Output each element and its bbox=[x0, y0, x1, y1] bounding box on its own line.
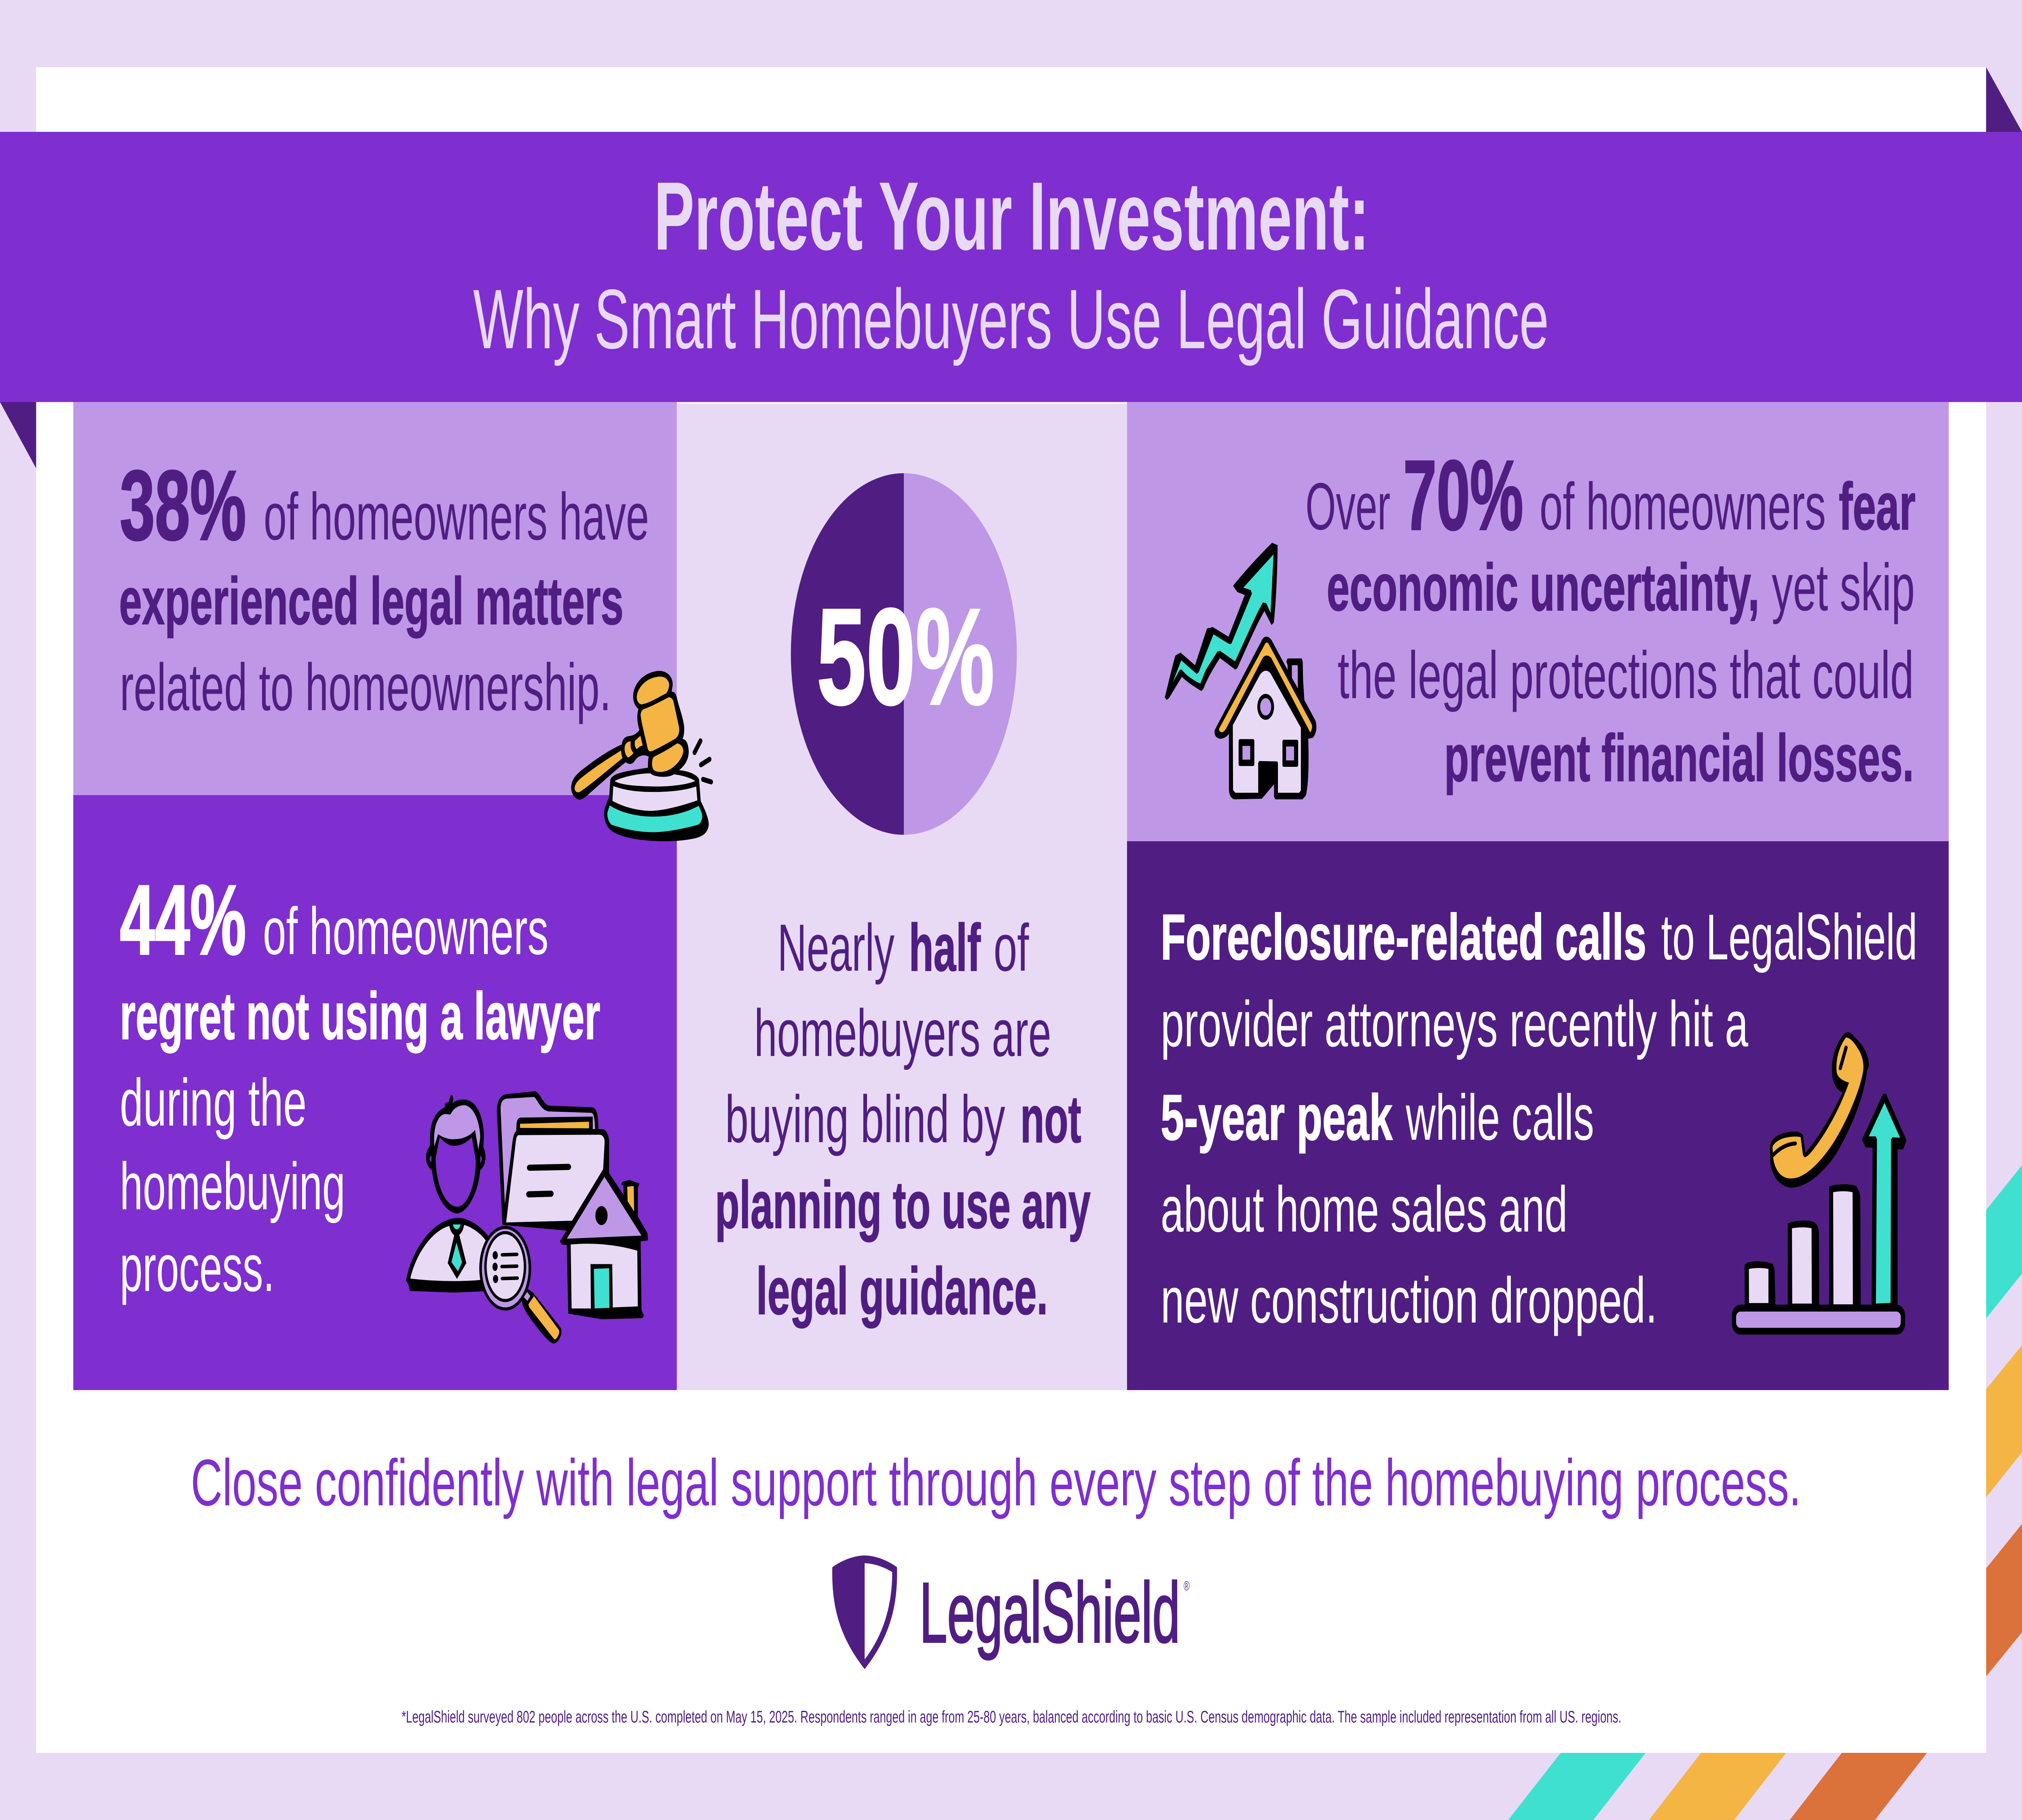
footnote: *LegalShield surveyed 802 people across the U.S. completed on May 15, 2025. Respondents ranged in age from 25-80 years, balanced according to basic U.S. Census demographic data. The sample included representation from all US. regions. bbox=[402, 1708, 1621, 1727]
text segment: Nearly bbox=[778, 910, 895, 985]
ribbon fold bottom left bbox=[0, 402, 36, 468]
text segment: of homeowners bbox=[1540, 469, 1826, 544]
text line: the legal protections that could bbox=[1338, 638, 1914, 713]
text line: of homeowners have bbox=[264, 479, 649, 554]
text segment: while calls bbox=[1405, 1081, 1594, 1154]
text line: of homeowners bbox=[263, 894, 548, 969]
logo: LegalShield bbox=[832, 1555, 1190, 1669]
bold segment: half bbox=[909, 910, 981, 985]
text line: about home sales and bbox=[1161, 1173, 1567, 1246]
panel: 38% stat bbox=[73, 402, 677, 795]
half pie right bbox=[904, 473, 1017, 835]
text line: homebuyers are bbox=[754, 996, 1051, 1071]
panel: 44% stat bbox=[73, 795, 677, 1390]
bold segment: 5-year peak bbox=[1161, 1081, 1393, 1154]
text segment: to LegalShield bbox=[1661, 901, 1917, 973]
wordmark: LegalShield bbox=[920, 1566, 1180, 1661]
bold segment: not bbox=[1020, 1082, 1081, 1157]
icon: gavel bbox=[571, 671, 711, 841]
bold segment: economic uncertainty, bbox=[1327, 550, 1760, 625]
text line: provider attorneys recently hit a bbox=[1161, 988, 1749, 1060]
subtitle: Why Smart Homebuyers Use Legal Guidance bbox=[473, 272, 1549, 366]
bold line: planning to use any bbox=[715, 1168, 1091, 1242]
text line: during the bbox=[120, 1065, 307, 1140]
text segment: Over bbox=[1305, 469, 1390, 544]
text line: related to homeownership. bbox=[120, 650, 611, 725]
title: Protect Your Investment: bbox=[654, 162, 1369, 271]
text line: homebuying bbox=[120, 1149, 345, 1224]
stat 38%: 38% bbox=[120, 450, 246, 561]
text line: process. bbox=[120, 1231, 275, 1306]
stat 50%: 50% bbox=[816, 580, 994, 734]
panel: foreclosure calls bbox=[1127, 841, 1949, 1390]
bold line: prevent financial losses. bbox=[1444, 721, 1914, 796]
stat 44%: 44% bbox=[120, 865, 246, 976]
tagline: Close confidently with legal support through every step of the homebuying process. bbox=[191, 1445, 1801, 1519]
text segment: of bbox=[994, 910, 1029, 985]
bold segment: Foreclosure-related calls bbox=[1161, 901, 1646, 973]
text line: new construction dropped. bbox=[1161, 1264, 1657, 1337]
half pie left bbox=[791, 473, 904, 835]
icon: rising arrow and house bbox=[1165, 543, 1316, 799]
bold text line: experienced legal matters bbox=[119, 564, 624, 639]
text segment: buying blind by bbox=[725, 1082, 1005, 1157]
bold text line: regret not using a lawyer bbox=[120, 979, 600, 1054]
decorative stripes bbox=[1508, 1165, 2022, 1820]
ribbon fold top right bbox=[1986, 67, 2022, 132]
title banner bbox=[0, 132, 2022, 402]
text segment: yet skip bbox=[1772, 550, 1915, 625]
stat 70%: 70% bbox=[1403, 440, 1523, 551]
panel: 70% stat bbox=[1127, 402, 1949, 841]
icon: shield bbox=[832, 1555, 897, 1669]
icon: telephone and rising bar chart bbox=[1732, 1032, 1907, 1335]
panel: center 50% stat bbox=[677, 404, 1127, 1390]
registered mark: ® bbox=[1184, 1579, 1190, 1593]
bold segment: fear bbox=[1839, 469, 1916, 544]
icon: lawyer, folder, magnifier and house bbox=[406, 1091, 648, 1344]
bold line: legal guidance. bbox=[756, 1254, 1048, 1329]
